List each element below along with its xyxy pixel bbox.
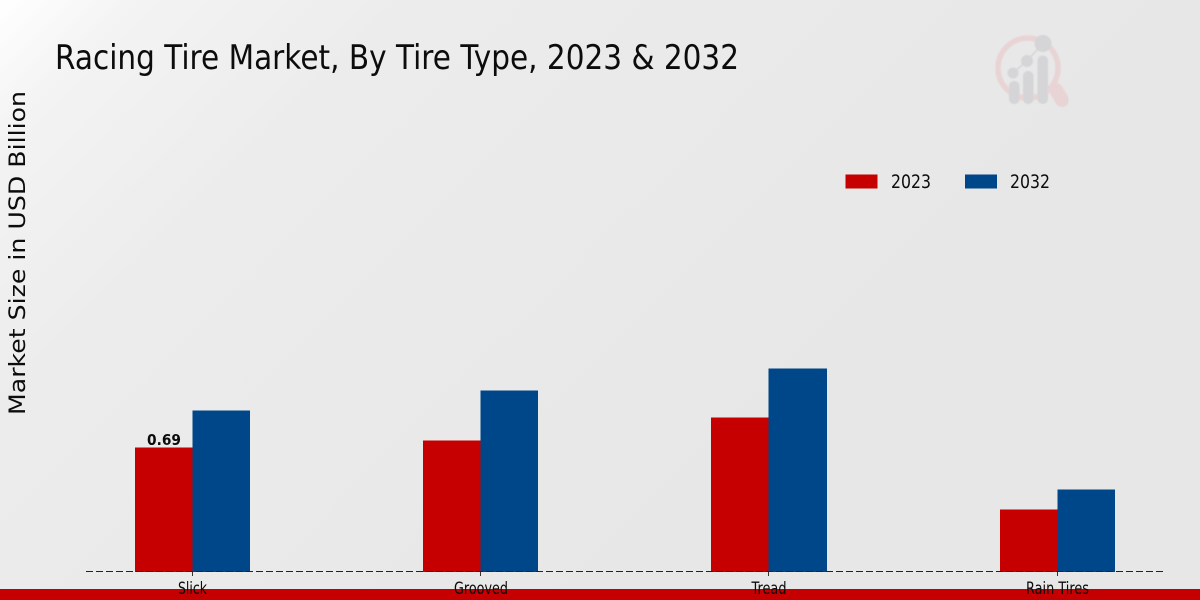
bars: Slick [135,410,250,572]
y axis label: Market Size in USD Billion [5,91,31,415]
x axis labels: Slick [178,579,207,598]
bars: Grooved [423,390,538,572]
x axis labels: Tread [751,579,786,598]
legend item: 2023: 2023 [891,171,931,193]
legend [846,171,1050,193]
bars: Rain Tires [1000,490,1115,572]
x axis labels [178,579,1089,598]
title: Racing Tire Market, By Tire Type, 2023 & 2032 [55,38,739,78]
x axis labels: Grooved [454,579,508,598]
bar chart [86,368,1165,576]
footer bar [0,589,1200,600]
icon: watermark logo [998,35,1062,104]
legend item: 2032 [965,171,1050,193]
x axis baseline [86,570,1165,572]
legend item: 2032: 2032 [1010,171,1050,193]
x axis labels: Rain Tires [1026,579,1089,598]
data label: 0.69: 0.69 [147,431,181,449]
legend item: 2023 [846,171,931,193]
bars: Tread [711,368,827,572]
